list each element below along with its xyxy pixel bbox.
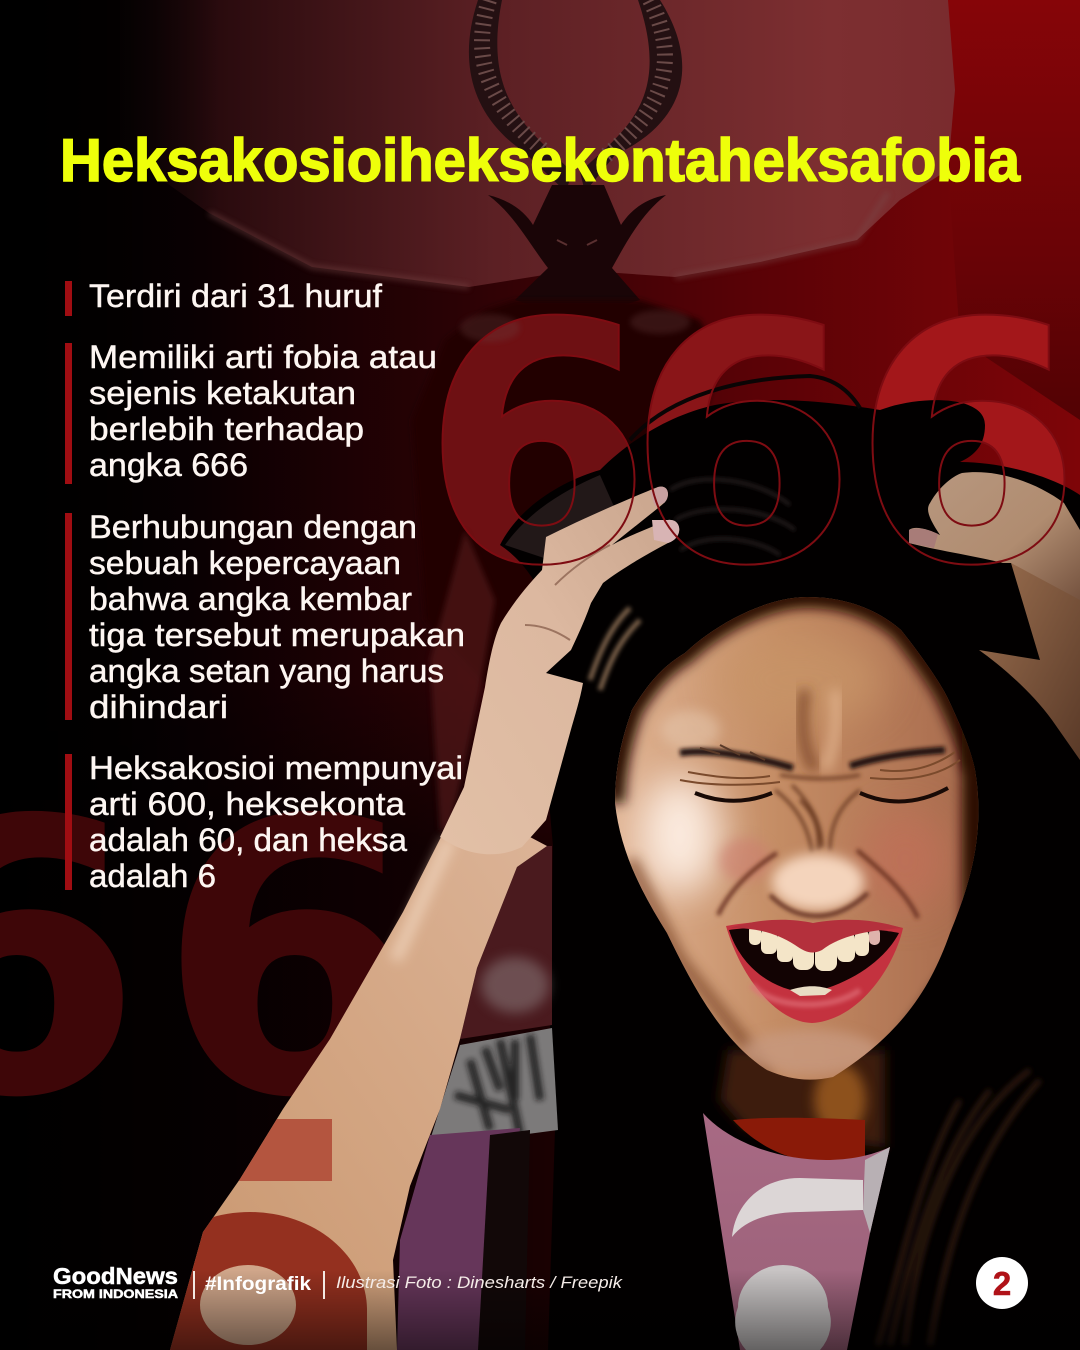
arm highlight	[395, 840, 450, 960]
bottom fade	[0, 1270, 1080, 1350]
nail right	[909, 528, 938, 548]
mouth: interior	[729, 927, 899, 993]
nose	[772, 854, 864, 910]
fact 1: Terdiri dari 31 huruf	[89, 278, 382, 314]
hair strands on the right	[878, 1070, 1040, 1345]
fact 2: Memiliki arti fobia atau	[89, 339, 437, 375]
teeth: upper	[749, 925, 880, 971]
fact 2: angka 666	[89, 447, 248, 483]
brow furrow	[802, 690, 815, 770]
numerals: large red 666 at top right: 6	[627, 254, 857, 639]
hair texture on bun	[670, 479, 795, 555]
nails	[652, 520, 679, 543]
grey hair tuft at left	[505, 475, 620, 560]
fact 3: bahwa angka kembar	[89, 581, 412, 617]
finger lines	[525, 545, 610, 640]
nose wrinkles	[775, 775, 860, 852]
forehead left light	[660, 710, 720, 750]
devil shoulders texture	[460, 310, 690, 342]
body	[412, 300, 720, 700]
illustration: screaming woman	[133, 376, 1080, 1350]
eyebrow right	[850, 750, 945, 766]
fact 4: adalah 6	[89, 858, 216, 894]
title: Heksakosioiheksekontaheksafobia	[60, 127, 1021, 194]
lower cheek pink	[719, 838, 771, 882]
photo credit: Ilustrasi Foto : Dinesharts / Freepik	[336, 1273, 624, 1292]
right shirt collar light	[863, 1147, 890, 1233]
divider two	[323, 1271, 325, 1299]
left lower shade	[630, 860, 770, 1075]
fact 3: dihindari	[89, 689, 228, 725]
logo: GoodNews from Indonesia: GoodNews	[53, 1263, 178, 1289]
left horn	[469, 0, 572, 192]
fact 4: Heksakosioi mempunyai	[89, 750, 463, 786]
shirt streaks	[455, 1035, 540, 1135]
numerals: large red 666 at top right: 6	[852, 254, 1080, 639]
fact 2: sejenis ketakutan	[89, 375, 356, 411]
numeral 6 on arm	[170, 1119, 367, 1350]
divider one	[193, 1271, 195, 1299]
fact 4: adalah 60, dan heksa	[89, 822, 407, 858]
page number badge	[976, 1257, 1028, 1309]
right forearm	[979, 563, 1080, 760]
numerals: thin red 666 outline over woman: 666	[422, 254, 1080, 639]
devil eyes	[557, 240, 597, 245]
eyebrow left	[680, 745, 793, 768]
illustration: devil silhouette with horns	[209, 0, 888, 700]
neck red bar	[733, 1118, 865, 1163]
right cheek tone	[882, 824, 946, 896]
hand left	[440, 487, 679, 854]
numerals: large red 666 at top right	[422, 254, 1080, 639]
hashtag: #Infografik	[205, 1274, 311, 1295]
fact 4: arti 600, heksekonta	[89, 786, 405, 822]
eye right	[860, 788, 948, 801]
left shirt speckle	[481, 957, 549, 1013]
eye creases	[680, 752, 960, 785]
logo: GoodNews from Indonesia	[53, 1263, 178, 1301]
logo: GoodNews from Indonesia: FROM INDONESIA	[53, 1287, 178, 1301]
horn ribs	[482, 0, 665, 157]
fact 3: tiga tersebut merupakan	[89, 617, 465, 653]
hairline shadow	[615, 597, 975, 803]
mouth: lip highlight	[752, 985, 860, 1005]
brown hair strands near hand	[590, 608, 640, 690]
chin tone	[740, 1030, 880, 1074]
left cheek highlight	[638, 775, 722, 895]
right edge shade	[900, 700, 975, 1060]
white gap of numeral 6	[732, 1178, 863, 1237]
hole of numeral 6	[735, 1265, 831, 1350]
left shirt maroon section	[460, 846, 552, 1039]
fact 2	[65, 339, 437, 484]
nasolabial folds	[718, 850, 918, 918]
hand right	[909, 472, 1080, 620]
upper lip	[730, 920, 902, 952]
mouth: lips	[726, 921, 903, 1023]
pale triangle behind hand	[430, 530, 495, 830]
right horn	[580, 0, 682, 192]
hair mass	[500, 400, 1080, 1350]
page number badge: 2	[993, 1265, 1011, 1302]
fact list	[65, 278, 465, 894]
footer	[53, 1257, 1028, 1309]
left shirt grey section	[430, 1028, 558, 1140]
face	[615, 597, 978, 1080]
left shirt purple section	[397, 1128, 520, 1350]
stray hair arcs	[630, 376, 860, 440]
teeth: lower	[790, 986, 832, 996]
fact 2: berlebih terhadap	[89, 411, 364, 447]
wing membrane edges	[209, 193, 888, 287]
eye left	[695, 793, 772, 801]
head and ear spikes	[488, 185, 666, 320]
numerals: large red 666 at top right: 6	[422, 254, 652, 639]
arm	[170, 800, 547, 1350]
left vignette	[0, 0, 220, 800]
forehead tone	[786, 643, 882, 716]
right shirt	[703, 1113, 890, 1350]
fact 3: sebuah kepercayaan	[89, 545, 401, 581]
neck	[720, 1050, 885, 1148]
fact 4	[65, 750, 463, 894]
fact 3: angka setan yang harus	[89, 653, 444, 689]
fact 3: Berhubungan dengan	[89, 509, 417, 545]
fact 3	[65, 509, 465, 725]
